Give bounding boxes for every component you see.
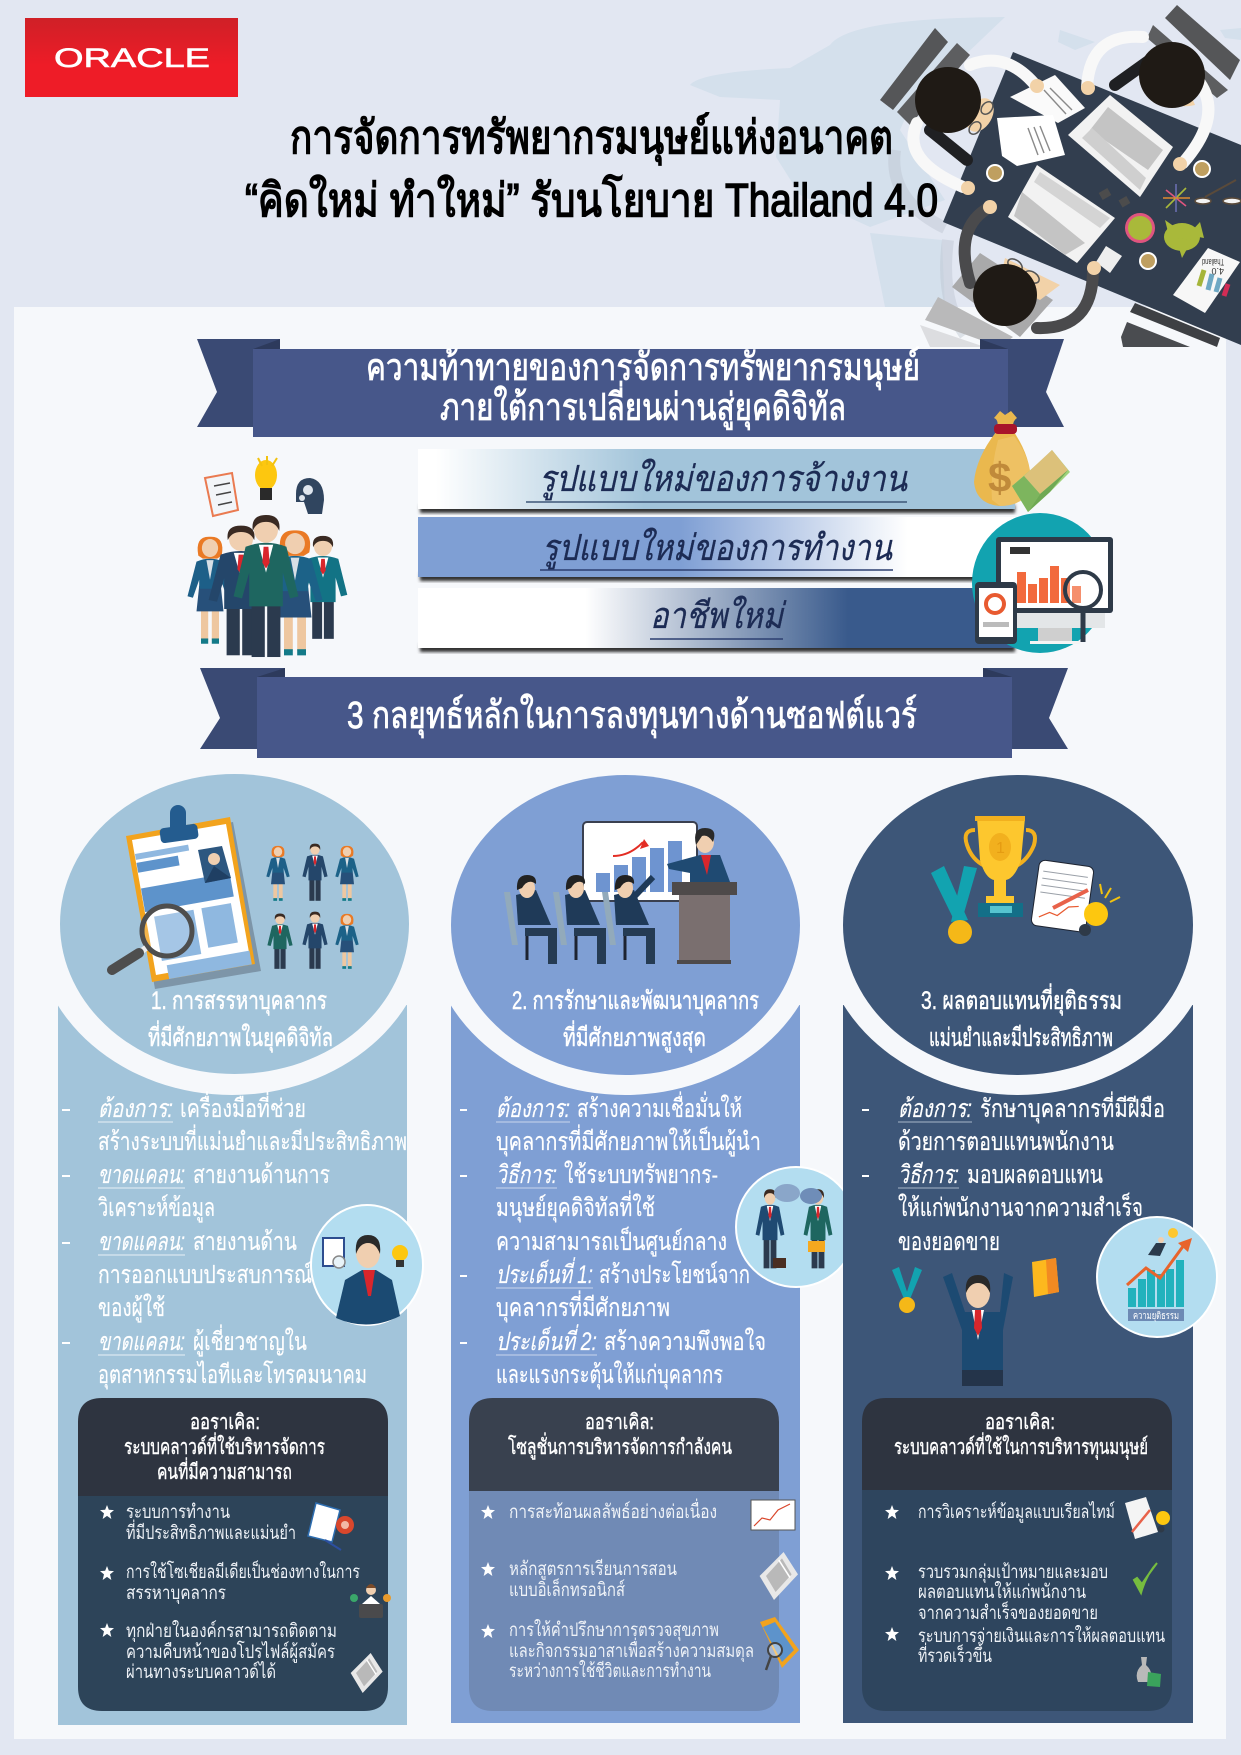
- text: needs and methods: [460, 1091, 766, 1390]
- text: needs and methods: สร้างความพึงพอใจ: [604, 1327, 766, 1356]
- documents and laptops: 4.0: [1211, 266, 1224, 276]
- icon: training presentation: [504, 822, 737, 964]
- world map backdrop: [690, 17, 1241, 307]
- text: needs and gaps: ขาดแคลน:: [98, 1328, 185, 1356]
- panel: Oracle cloud recruitment solution: ที่มีประสิทธิภาพและแม่นยำ: [126, 1519, 296, 1544]
- text: needs and gaps: อุตสาหกรรมไอทีและโทรคมนาคม: [98, 1360, 367, 1390]
- icon: notepad and bulb: [1125, 1497, 1170, 1539]
- text: needs and gaps: ขาดแคลน:: [98, 1161, 185, 1189]
- documents and laptops: Thailand: [1202, 257, 1224, 267]
- text: needs and methods: ให้แก่พนักงานจากความสำเร็จ: [898, 1192, 1143, 1222]
- white gap ellipse: [34, 924, 430, 1095]
- text: needs and methods: ประเด็นที่ 1:: [496, 1257, 593, 1289]
- documents and laptops: [997, 75, 1240, 313]
- text: needs and gaps: ผู้เชี่ยวชาญใน: [193, 1324, 307, 1357]
- text: needs and methods: สร้างความเชื่อมั่นให้: [577, 1091, 742, 1123]
- panel: Oracle workforce solution: การสะท้อนผลลัพธ์อย่างต่อเนื่อง: [509, 1498, 717, 1523]
- text: needs and gaps: ขาดแคลน:: [98, 1228, 185, 1256]
- bar: new careers: อาชีพใหม่: [650, 595, 787, 636]
- icon: growth chart circle: [1097, 1217, 1217, 1337]
- text: needs and methods: ด้วยการตอบแทนพนักงาน: [898, 1128, 1114, 1156]
- icon: resume clipboard and magnifier: [112, 805, 261, 989]
- title: “คิดใหม่ ทำใหม่” รับนโยบาย Thailand 4.0: [245, 174, 938, 226]
- text: needs and gaps: ต้องการ:: [98, 1095, 173, 1123]
- text: needs and gaps: สายงานด้าน: [193, 1228, 297, 1256]
- text: needs and gaps: วิเคราะห์ข้อมูล: [98, 1194, 215, 1223]
- text: needs and methods: ของยอดขาย: [898, 1228, 1000, 1256]
- panel: Oracle cloud recruitment solution: [78, 1398, 391, 1711]
- text: needs and methods: [862, 1091, 1165, 1256]
- heading circle: [60, 774, 409, 1074]
- panel: Oracle workforce solution: [469, 1398, 799, 1711]
- bar: new work models: [418, 517, 1015, 581]
- heading: [512, 987, 759, 1053]
- text: needs and methods: ความสามารถเป็นศูนย์กลาง: [496, 1226, 727, 1257]
- column background: [58, 1005, 407, 1725]
- text: needs and methods: และแรงกระตุ้นให้แก่บุคลากร: [496, 1360, 723, 1390]
- icon: growth chart circle: ความยุติธรรม: [1133, 1311, 1179, 1322]
- panel: Oracle cloud recruitment solution: ออราเคิล:: [190, 1411, 260, 1434]
- panel: Oracle human capital solution: ที่รวดเร็วขึ้น: [918, 1642, 992, 1667]
- icon: colleagues talking circle: [736, 1167, 856, 1287]
- column background: [451, 1005, 800, 1723]
- heading: 2. การรักษาและพัฒนาบุคลากร: [512, 987, 759, 1016]
- text: needs and gaps: ของผู้ใช้: [98, 1293, 165, 1323]
- illustration: meeting table top view: [880, 5, 1241, 347]
- text: needs and methods: ใช้ระบบทรัพยากร-: [564, 1160, 718, 1189]
- icon: employee team: [188, 456, 347, 657]
- heading: 1. การสรรหาบุคลากร: [151, 987, 327, 1016]
- panel: Oracle workforce solution: ระหว่างการใช้ชีวิตและการทำงาน: [509, 1660, 711, 1682]
- text: needs and methods: ต้องการ:: [898, 1095, 972, 1123]
- white gap ellipse: [427, 924, 823, 1095]
- panel: Oracle human capital solution: ออราเคิล:: [985, 1411, 1055, 1434]
- icon: recruiter with laptop: [350, 1584, 391, 1618]
- student group: [504, 875, 655, 964]
- icon: money bag small: [1137, 1657, 1161, 1687]
- chairs and soft shadows: [880, 5, 1240, 347]
- icon: money bag: $: [988, 454, 1011, 501]
- heading circle: [843, 775, 1193, 1075]
- heading: [921, 983, 1122, 1052]
- lower right chairs: [1121, 303, 1220, 347]
- banner: challenges heading: [197, 339, 1064, 437]
- white content panel: [14, 307, 1226, 1739]
- icon: line chart card: [751, 1500, 795, 1530]
- logo: Oracle: [25, 18, 238, 97]
- text: needs and methods: วิธีการ:: [496, 1161, 557, 1189]
- panel: Oracle human capital solution: ระบบการจ่ายเงินและการให้ผลตอบแทน: [918, 1625, 1165, 1647]
- panel: strategy 3 rewards: [820, 775, 1217, 1723]
- panel: Oracle cloud recruitment solution: ระบบการทำงาน: [126, 1502, 230, 1523]
- panel: Oracle cloud recruitment solution: คนที่มีความสามารถ: [157, 1457, 292, 1484]
- text: needs and gaps: [62, 1091, 407, 1390]
- panel: Oracle cloud recruitment solution: ทุกฝ่ายในองค์กรสามารถติดตาม: [126, 1620, 337, 1643]
- icon: newspaper: [351, 1653, 383, 1693]
- icon: trophy medal notepad: 1: [996, 840, 1005, 857]
- table: [943, 52, 1241, 345]
- banner: three strategies heading: 3 กลยุทธ์หลักในการลงทุนทางด้านซอฟต์แวร์: [347, 694, 917, 738]
- icon: newspaper: [760, 1552, 798, 1600]
- text: needs and methods: มอบผลตอบแทน: [967, 1161, 1103, 1189]
- icon: celebrating employee with medal and briefcase: [892, 1258, 1059, 1386]
- text: needs and gaps: สร้างระบบที่แม่นยำและมีประสิทธิภาพ: [98, 1124, 407, 1156]
- banner: challenges heading: ความท้าทายของการจัดการทรัพยากรมนุษย์: [366, 346, 920, 390]
- panel: Oracle cloud recruitment solution: ผ่านทางระบบคลาวด์ได้: [126, 1661, 276, 1683]
- heading circle: [451, 775, 800, 1075]
- panel: Oracle cloud recruitment solution: สรรหาบุคลากร: [126, 1583, 226, 1605]
- heading: 3. ผลตอบแทนที่ยุติธรรม: [921, 983, 1122, 1016]
- icon: check mark: [1134, 1563, 1157, 1593]
- panel: Oracle human capital solution: จากความสำเร็จของยอดขาย: [918, 1600, 1098, 1624]
- panel: Oracle workforce solution: หลักสูตรการเรียนการสอน: [509, 1558, 677, 1580]
- heading: ที่มีศักยภาพสูงสุด: [563, 1020, 706, 1053]
- panel: strategy 2 retention: [427, 775, 856, 1723]
- heading: [148, 987, 333, 1053]
- panel: Oracle cloud recruitment solution: ความคืบหน้าของโปรไฟล์ผู้สมัคร: [126, 1640, 335, 1663]
- white gap ellipse: [820, 924, 1216, 1095]
- bar: new work models: รูปแบบใหม่ของการทำงาน: [542, 527, 893, 570]
- title: [245, 111, 938, 226]
- banner: three strategies heading: [200, 668, 1068, 758]
- text: needs and methods: บุคลากรที่มีศักยภาพให้เป็นผู้นำ: [496, 1124, 761, 1157]
- text: needs and methods: รักษาบุคลากรที่มีฝีมือ: [980, 1091, 1165, 1124]
- heading: ที่มีศักยภาพในยุคดิจิทัล: [148, 1020, 333, 1053]
- panel: strategy 1 recruitment: [34, 774, 430, 1725]
- panel: Oracle workforce solution: ออราเคิล:: [585, 1411, 654, 1434]
- heading: แม่นยำและมีประสิทธิภาพ: [929, 1024, 1113, 1052]
- bar: new employment models: [418, 449, 1015, 513]
- icon: manager circle: [311, 1205, 423, 1325]
- panel: Oracle workforce solution: แบบอิเล็กทรอนิกส์: [509, 1577, 625, 1601]
- icon: money bag: [974, 411, 1070, 512]
- bar: new careers: [418, 588, 1015, 652]
- panel: Oracle workforce solution: การให้คำปรึกษาการตรวจสุขภาพ: [509, 1619, 719, 1642]
- logo: Oracle: ORACLE: [54, 43, 210, 73]
- icon: notepad and target: [308, 1503, 354, 1550]
- text: needs and gaps: เครื่องมือที่ช่วย: [180, 1091, 306, 1123]
- panel: Oracle cloud recruitment solution: ระบบคลาวด์ที่ใช้บริหารจัดการ: [124, 1432, 325, 1459]
- text: needs and methods: บุคลากรที่มีศักยภาพ: [496, 1290, 670, 1323]
- icon: analytics dashboard: [972, 513, 1113, 653]
- cups, plant, stationery: [986, 160, 1241, 273]
- panel: Oracle human capital solution: ระบบคลาวด์ที่ใช้ในการบริหารทุนมนุษย์: [894, 1432, 1148, 1460]
- icon: clipboard and magnifier: [760, 1617, 799, 1670]
- text: needs and methods: ต้องการ:: [496, 1095, 570, 1123]
- text: needs and methods: มนุษย์ยุคดิจิทัลที่ใช้: [496, 1190, 655, 1223]
- text: needs and gaps: การออกแบบประสบการณ์: [98, 1261, 312, 1289]
- panel: Oracle human capital solution: ผลตอบแทนให้แก่พนักงาน: [918, 1581, 1086, 1603]
- panel: Oracle human capital solution: [862, 1398, 1172, 1711]
- panel: Oracle workforce solution: และกิจกรรมอาสาเพื่อสร้างความสมดุล: [509, 1637, 754, 1663]
- column background: [843, 1005, 1193, 1723]
- icon: trophy medal notepad: [931, 816, 1120, 944]
- banner: challenges heading: ภายใต้การเปลี่ยนผ่านสู่ยุคดิจิทัล: [440, 381, 846, 430]
- text: needs and methods: ประเด็นที่ 2:: [496, 1324, 597, 1356]
- text: needs and methods: วิธีการ:: [898, 1161, 959, 1189]
- text: needs and methods: สร้างประโยชน์จาก: [599, 1260, 750, 1289]
- bar: new employment models: รูปแบบใหม่ของการจ้างงาน: [539, 458, 908, 501]
- panel: Oracle cloud recruitment solution: การใช้โซเชียลมีเดียเป็นช่องทางในการ: [126, 1559, 360, 1583]
- panel: Oracle workforce solution: โซลูชั่นการบริหารจัดการกำลังคน: [508, 1432, 732, 1460]
- title: การจัดการทรัพยากรมนุษย์แห่งอนาคต: [290, 111, 893, 166]
- icon: candidates: [266, 844, 359, 969]
- panel: Oracle human capital solution: การวิเคราะห์ข้อมูลแบบเรียลไทม์: [918, 1501, 1115, 1523]
- heads and hands: [915, 42, 1205, 326]
- text: needs and gaps: สายงานด้านการ: [193, 1161, 330, 1189]
- people seated at table: [913, 37, 1208, 328]
- panel: Oracle human capital solution: รวบรวมกลุ่มเป้าหมายและมอบ: [918, 1562, 1108, 1584]
